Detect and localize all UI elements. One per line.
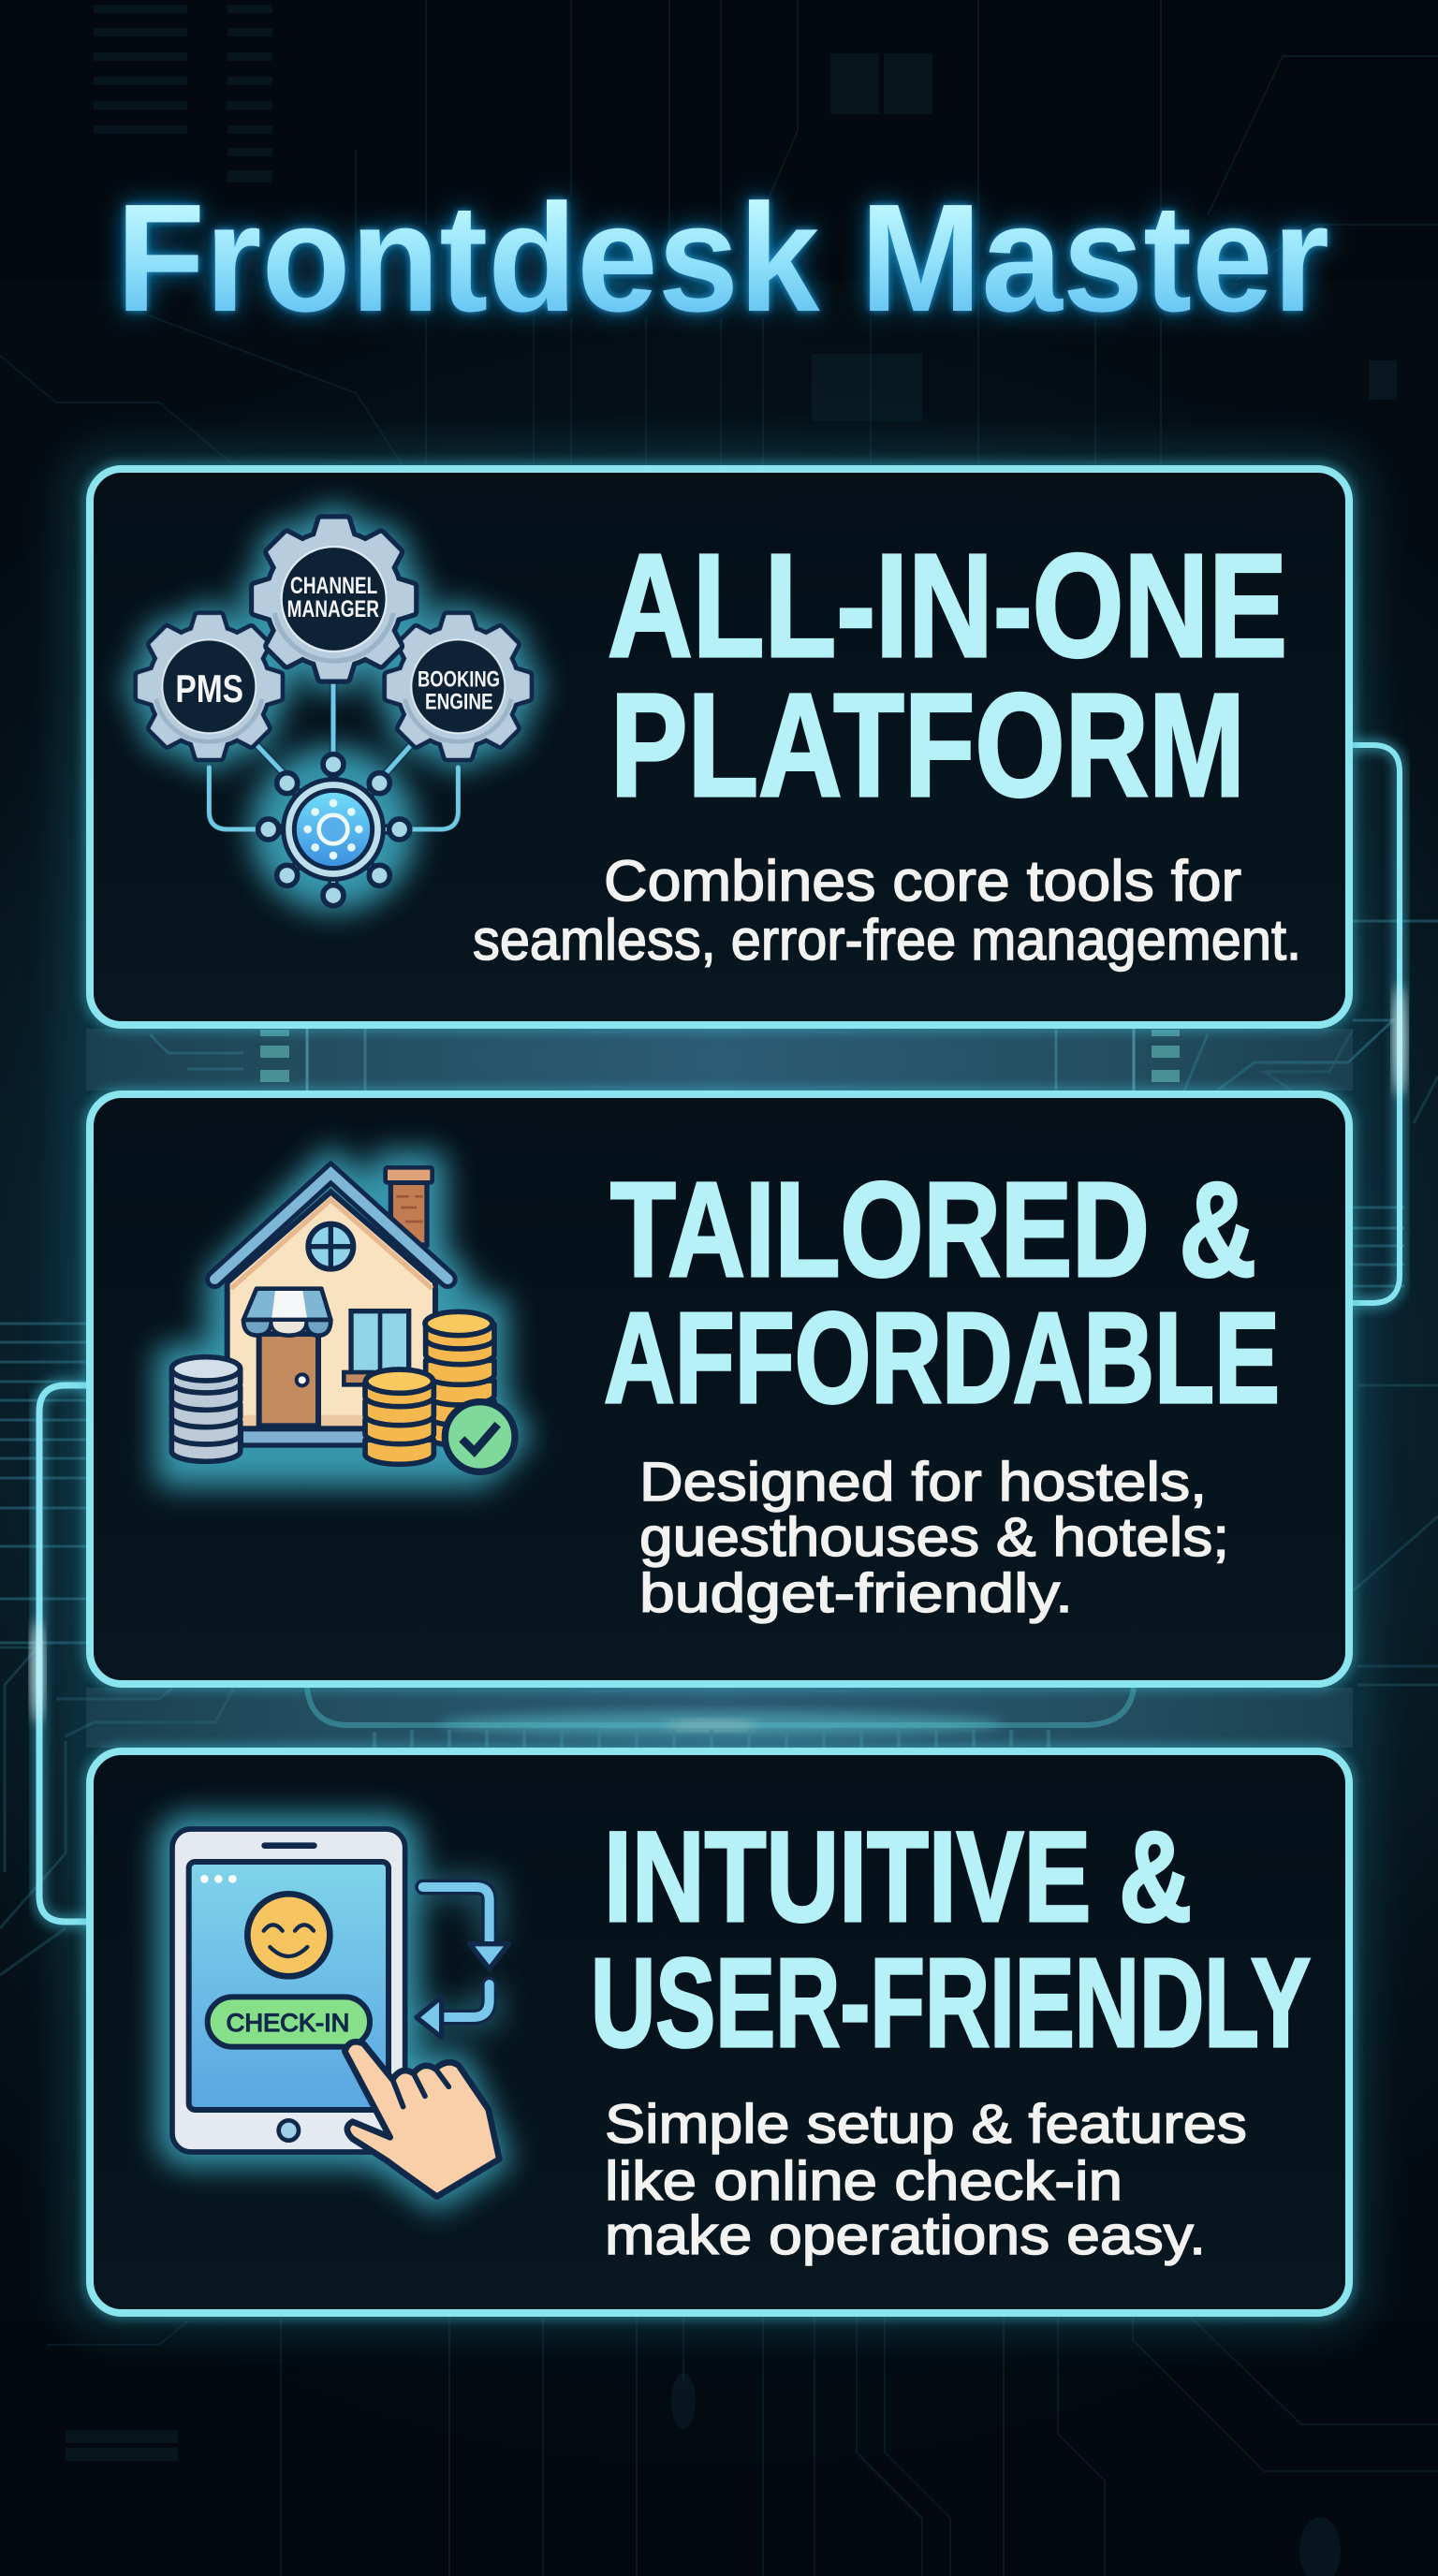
text: intuitive description: make operations easy. [605, 2205, 1206, 2266]
text: tailored description: Designed for hostels, [639, 1452, 1207, 1513]
text: all-in-one description: Combines core tools for [604, 849, 1241, 913]
heading: tailored and affordable [604, 1154, 1280, 1430]
connector: card 2 to card 3 [31, 1385, 90, 1922]
heading: all-in-one platform: PLATFORM [610, 664, 1245, 827]
text: intuitive description: like online check-in [605, 2151, 1123, 2212]
icon: tablet with check-in button and hand: CHECK-IN [227, 2009, 349, 2037]
icon: connected gears and hub: BOOKING [418, 666, 500, 692]
heading: all-in-one platform [608, 524, 1287, 827]
text: all-in-one description: seamless, error-free management. [473, 908, 1301, 972]
side glows around the cards [56, 440, 1376, 2340]
title: Frontdesk Master [116, 172, 1329, 344]
panel: intuitive and user-friendly [90, 1751, 1349, 2313]
heading: intuitive and user-friendly: INTUITIVE & [604, 1806, 1192, 1949]
text: all-in-one description [473, 849, 1301, 972]
connector: card 1 to card 2 [1349, 745, 1406, 1303]
heading: intuitive and user-friendly [591, 1806, 1311, 2073]
icon: house with coin stacks [169, 1161, 518, 1474]
heading: all-in-one platform: ALL-IN-ONE [608, 524, 1287, 688]
icon: connected gears and hub: MANAGER [287, 597, 379, 622]
panel: tailored and affordable [90, 1094, 1349, 1684]
text: tailored description [639, 1452, 1229, 1624]
text: intuitive description: Simple setup & features [605, 2094, 1247, 2155]
icon: connected gears and hub [139, 520, 529, 906]
text: tailored description: guesthouses & hotels; [639, 1507, 1229, 1568]
icon: tablet with check-in button and hand [169, 1825, 508, 2200]
panel: all-in-one platform [90, 469, 1349, 1025]
heading: tailored and affordable: TAILORED & [610, 1154, 1256, 1305]
icon: connected gears and hub: PMS [175, 667, 243, 710]
text: tailored description: budget-friendly. [639, 1563, 1073, 1624]
icon: connected gears and hub: ENGINE [425, 690, 493, 715]
text: intuitive description [605, 2094, 1247, 2266]
icon: connected gears and hub: CHANNEL [290, 574, 377, 599]
